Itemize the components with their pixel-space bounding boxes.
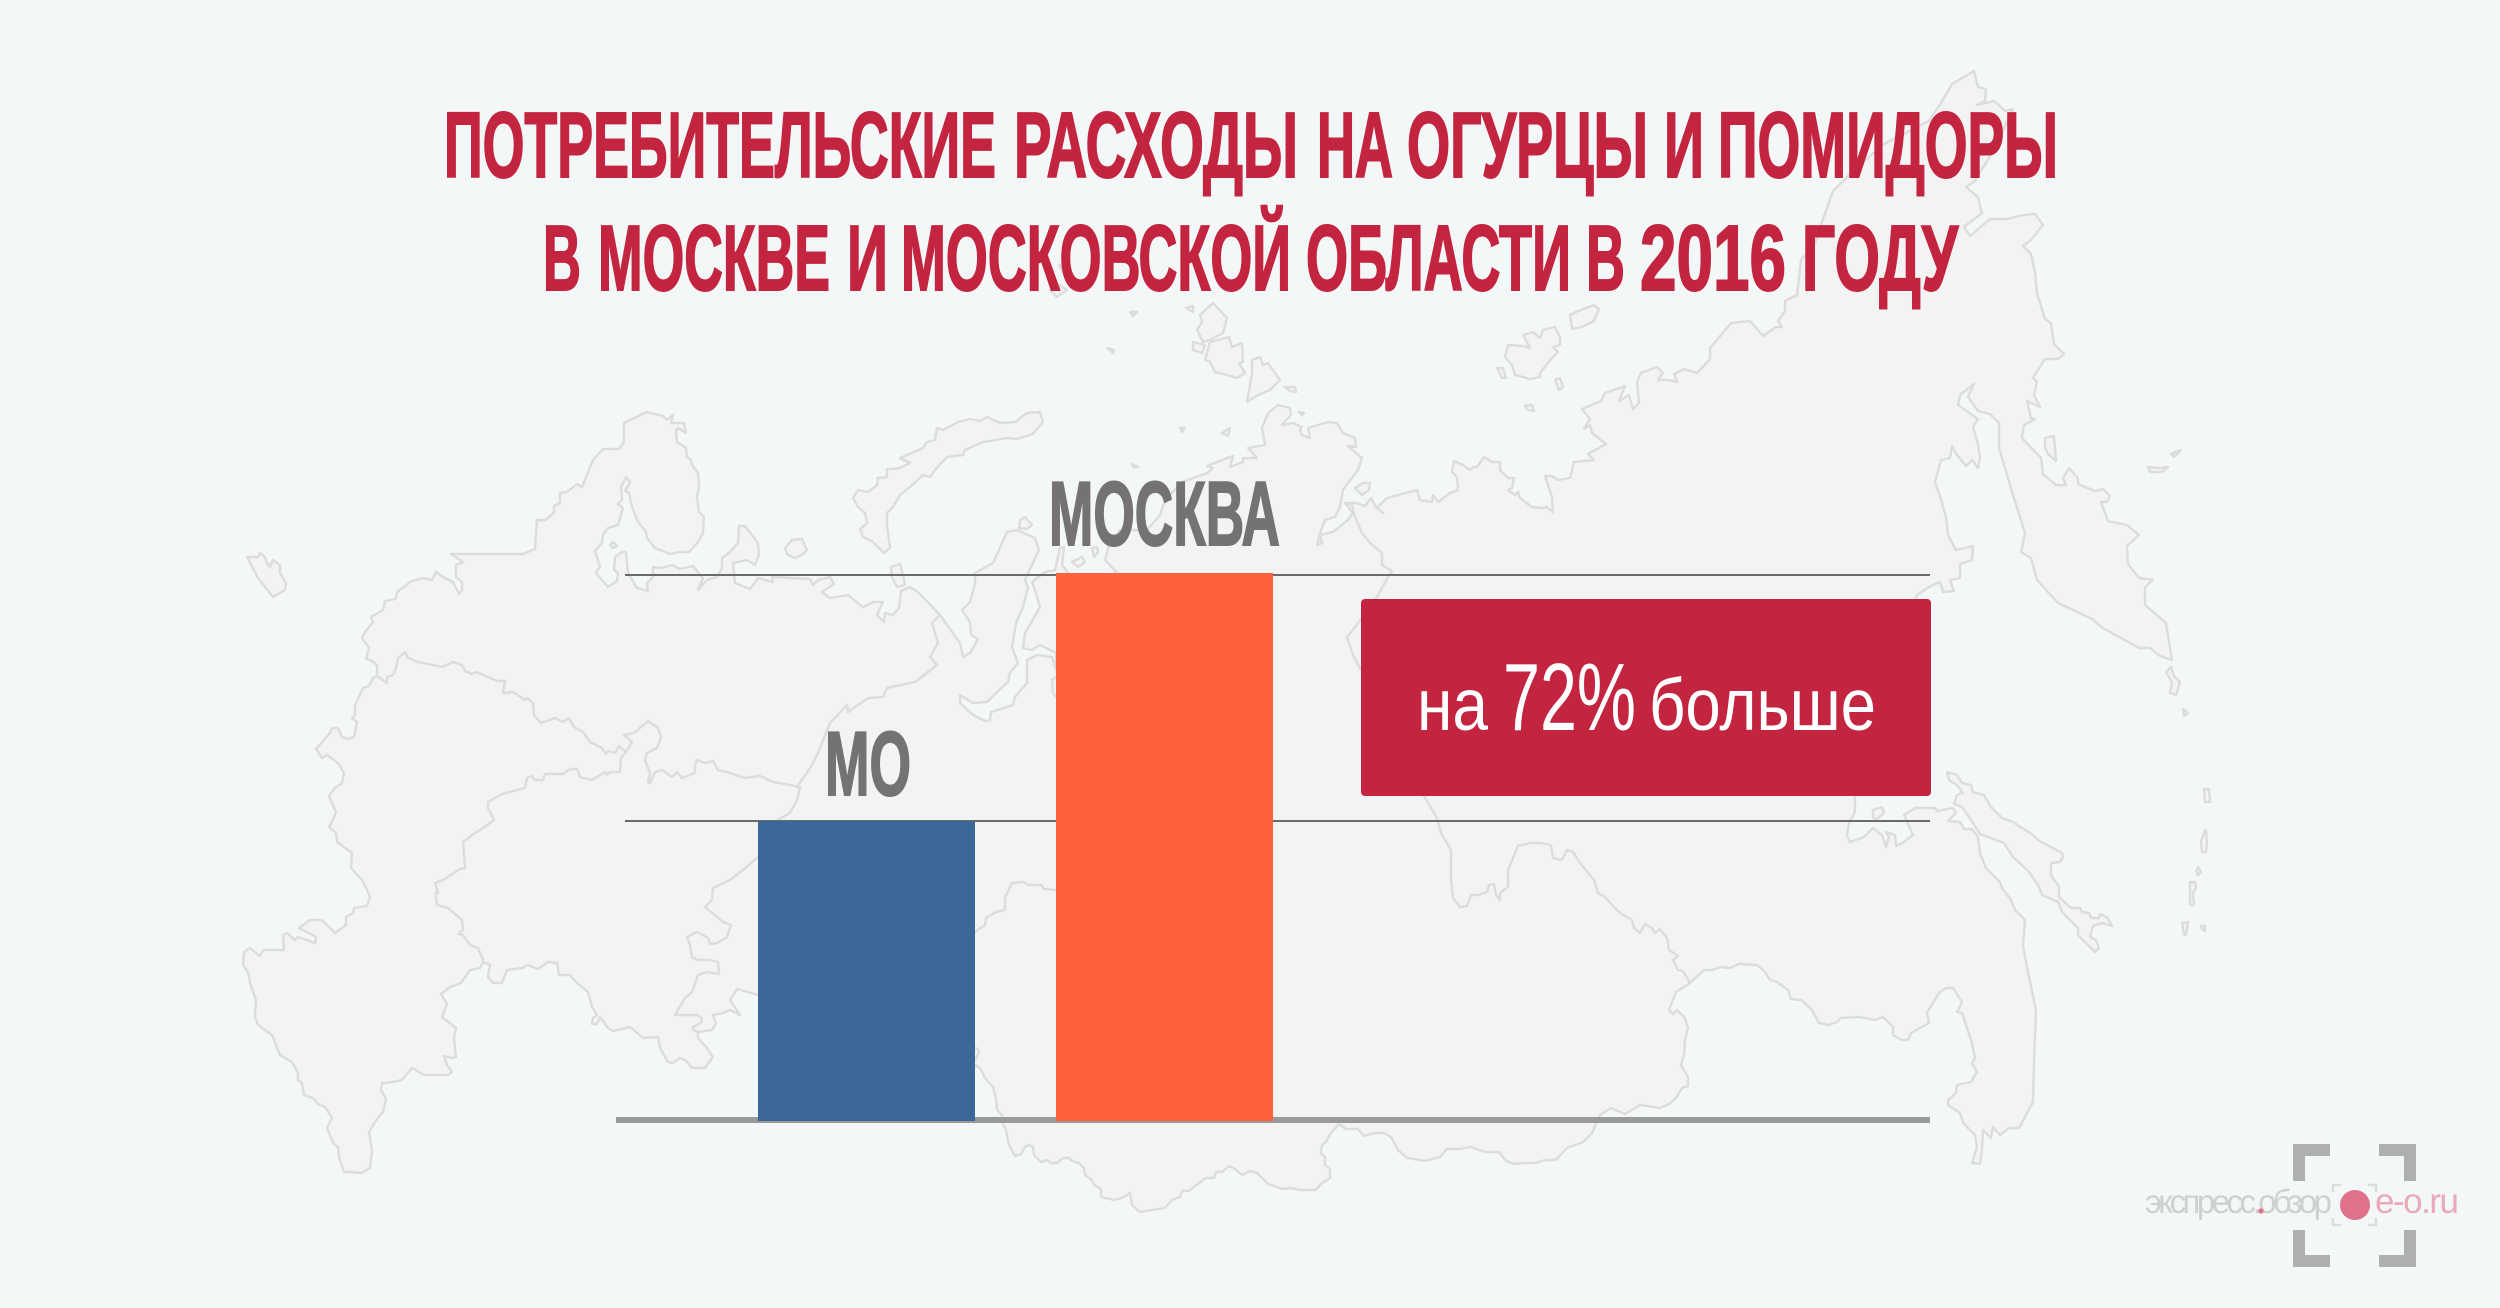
- bar: Moscow: [1056, 573, 1273, 1121]
- callout: 72% more: [1361, 599, 1931, 796]
- logo: domain: e-o.ru: [2375, 1182, 2459, 1221]
- title: ОБЛАСТИ: [1306, 206, 1571, 310]
- title: РАСХОДЫ: [1014, 93, 1298, 197]
- title: В: [543, 206, 581, 310]
- gridline: Moscow level: [625, 574, 1930, 576]
- bar: Moscow Oblast: [758, 821, 975, 1121]
- logo: express-review watermark: [2145, 1144, 2459, 1267]
- title: [444, 93, 2058, 310]
- gridline: Moscow Oblast level: [625, 820, 1930, 822]
- axis baseline: [616, 1117, 1930, 1123]
- title: МОСКВЕ: [598, 206, 830, 310]
- map: mainland: [243, 71, 2172, 1212]
- logo: red dot: [2340, 1190, 2370, 1220]
- callout: 72% more: на: [1417, 665, 1488, 746]
- logo: small corner brackets: [2333, 1185, 2376, 1225]
- title: И: [1664, 93, 1704, 197]
- logo: small dot: [2258, 1208, 2264, 1214]
- title: МОСКОВСКОЙ: [901, 206, 1291, 310]
- bar chart: [616, 464, 1930, 1123]
- label: Moscow: МОСКВА: [1049, 464, 1280, 565]
- map: islands: [247, 265, 2210, 952]
- title: 2016: [1640, 206, 1786, 310]
- title: В: [1586, 206, 1625, 310]
- title: ПОМИДОРЫ: [1718, 93, 2058, 197]
- callout: 72% more: больше: [1649, 665, 1876, 746]
- title: И: [847, 206, 888, 310]
- map: internal district borders: [377, 503, 1690, 1060]
- logo: large corner brackets: [2293, 1144, 2416, 1267]
- label: MO: МО: [825, 714, 911, 815]
- background map of Russia: [243, 71, 2210, 1212]
- title: ГОДУ: [1802, 206, 1959, 310]
- callout: 72% more: 72%: [1503, 644, 1636, 751]
- title: ОГУРЦЫ: [1407, 93, 1648, 197]
- title: НА: [1317, 93, 1393, 197]
- title: ПОТРЕБИТЕЛЬСКИЕ: [444, 93, 996, 197]
- logo: wordmark: экспресс.обзор: [2145, 1183, 2332, 1220]
